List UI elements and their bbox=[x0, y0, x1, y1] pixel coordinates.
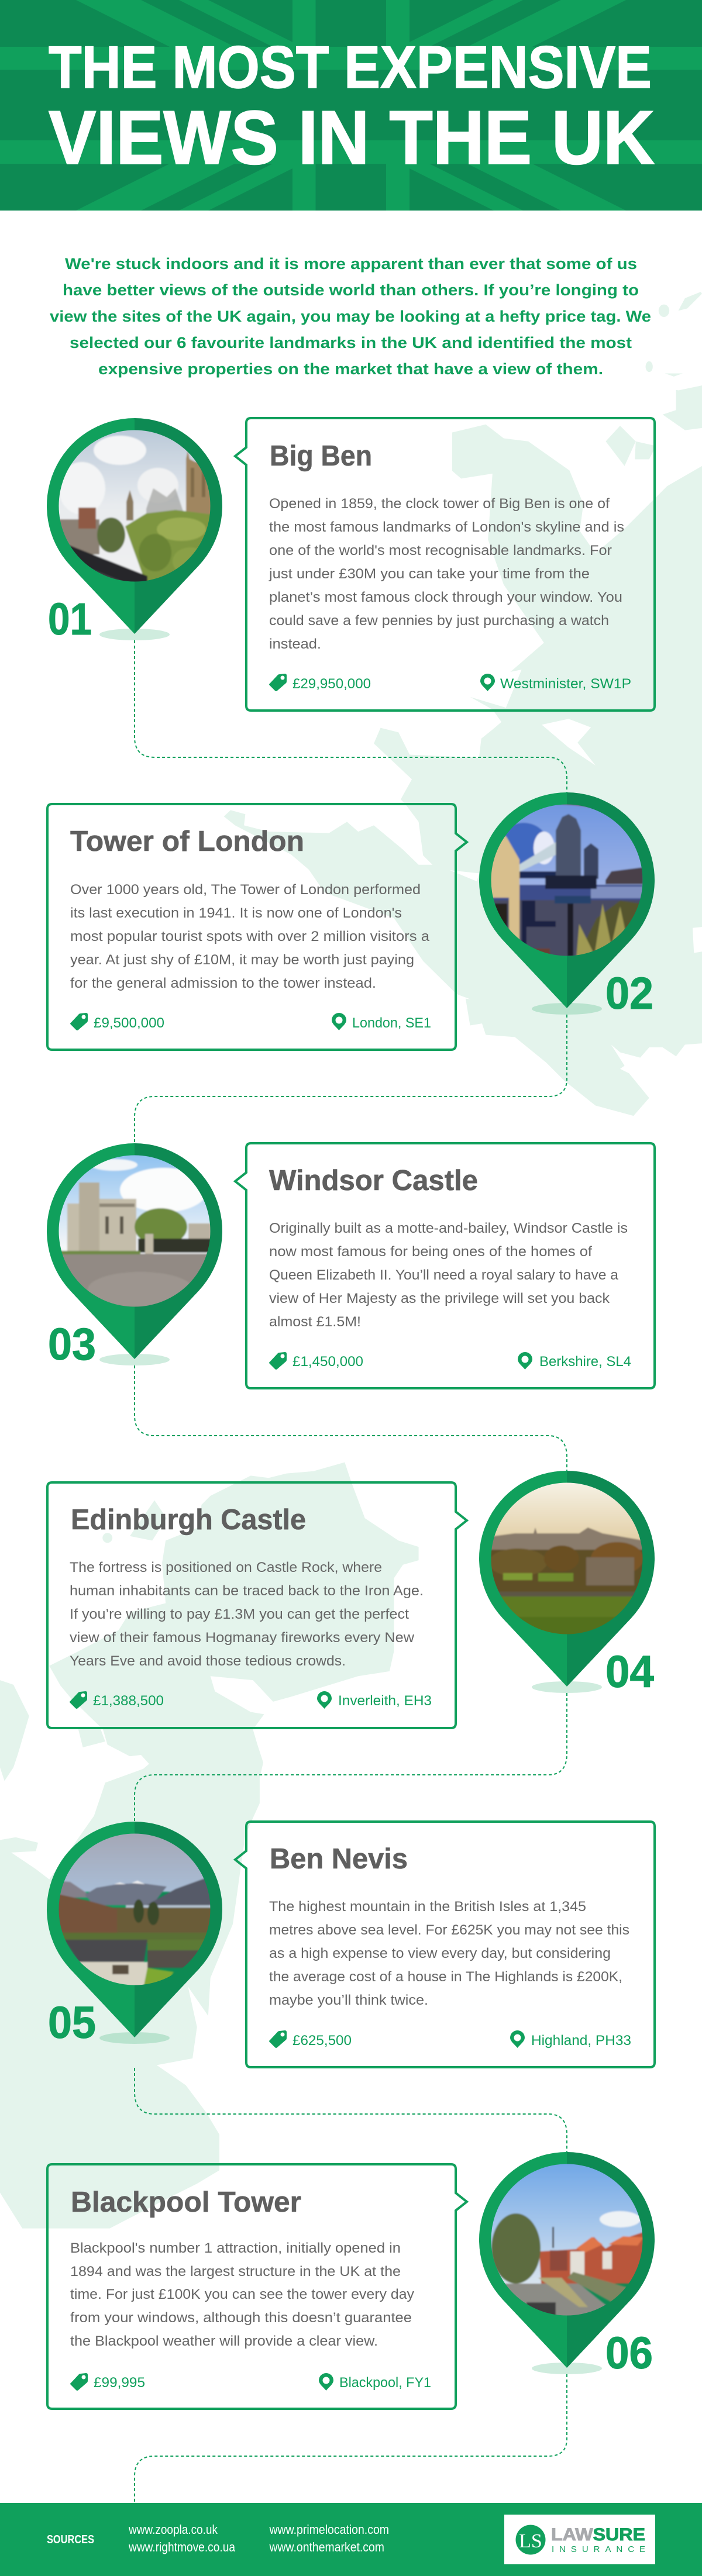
title bbox=[49, 34, 655, 180]
icon: location bbox=[510, 2030, 525, 2048]
pin 02: Tower Bridge photo bbox=[479, 792, 655, 1015]
description: Opened in 1859, the clock tower of Big Ben is one of bbox=[269, 496, 610, 512]
card outline bbox=[47, 804, 467, 1050]
card outline bbox=[47, 2164, 467, 2409]
intro text: have better views of the outside world than others. If you’re longing to bbox=[63, 281, 639, 299]
location: Westminister, SW1P bbox=[500, 676, 631, 692]
icon: location bbox=[317, 1691, 332, 1709]
intro text: view the sites of the UK again, you may be looking at a hefty price tag. We bbox=[50, 308, 651, 325]
description: instead. bbox=[269, 636, 321, 652]
heading: Edinburgh Castle bbox=[71, 1504, 306, 1536]
number 04: 04 bbox=[605, 1647, 654, 1697]
description bbox=[269, 496, 624, 652]
location: Blackpool, FY1 bbox=[339, 2375, 431, 2391]
location: Inverleith, EH3 bbox=[338, 1693, 432, 1709]
card outline bbox=[235, 418, 655, 711]
description: almost £1.5M! bbox=[269, 1314, 361, 1330]
pin 04: Edinburgh photo bbox=[479, 1471, 655, 1693]
description bbox=[269, 1899, 629, 2008]
icon: location bbox=[319, 2373, 333, 2391]
description: from your windows, although this doesn’t guarantee bbox=[70, 2310, 412, 2326]
pin 05: Ben Nevis photo bbox=[47, 1822, 222, 2044]
description: view of their famous Hogmanay fireworks every New bbox=[70, 1630, 415, 1646]
card outline bbox=[47, 1482, 467, 1728]
panel: Ben Nevis bbox=[235, 1822, 655, 2067]
card outline bbox=[235, 1143, 655, 1388]
description: Over 1000 years old, The Tower of London performed bbox=[70, 882, 421, 898]
sources heading: SOURCES bbox=[47, 2533, 94, 2546]
heading: Blackpool Tower bbox=[71, 2187, 301, 2218]
price: £99,995 bbox=[94, 2375, 145, 2391]
icon: price tag bbox=[70, 1691, 87, 1709]
description: planet’s most famous clock through your window. You bbox=[269, 589, 622, 605]
description: maybe you’ll think twice. bbox=[269, 1992, 428, 2008]
header: union flag background bbox=[0, 0, 702, 211]
description: for the general admission to the tower instead. bbox=[70, 975, 376, 991]
description: could save a few pennies by just purchasing a watch bbox=[269, 613, 609, 629]
logo: Lawsure Insurance: LS bbox=[519, 2530, 542, 2552]
heading: Big Ben bbox=[270, 440, 372, 472]
description: view of Her Majesty as the privilege will set you back bbox=[269, 1291, 610, 1306]
description: 1894 and was the largest structure in the UK at the bbox=[70, 2264, 401, 2280]
description: as a high expense to view every day, but considering bbox=[269, 1946, 611, 1961]
description bbox=[70, 1560, 424, 1669]
connector: pin 4 to pin 5 bbox=[135, 1693, 567, 1822]
pin 06: Blackpool photo bbox=[479, 2152, 655, 2374]
panel: Edinburgh Castle bbox=[47, 1482, 467, 1728]
price: £29,950,000 bbox=[292, 676, 371, 692]
panel: Tower of London bbox=[47, 804, 467, 1050]
number 06: 06 bbox=[605, 2328, 653, 2378]
description: human inhabitants can be traced back to the Iron Age. bbox=[70, 1583, 424, 1599]
card outline bbox=[235, 1822, 655, 2067]
description: Queen Elizabeth II. You’ll need a royal salary to have a bbox=[269, 1267, 619, 1283]
description: most popular tourist spots with over 2 million visitors a bbox=[70, 929, 430, 944]
source links bbox=[128, 2522, 389, 2554]
connector: pin 6 to footer bbox=[135, 2374, 567, 2503]
icon: price tag bbox=[269, 2030, 287, 2048]
icon: location bbox=[480, 674, 495, 691]
intro text: expensive properties on the market that have a view of them. bbox=[98, 360, 603, 378]
panel: Big Ben bbox=[235, 418, 655, 711]
pin 01: Big Ben photo bbox=[47, 418, 222, 640]
intro text: selected our 6 favourite landmarks in the UK and identified the most bbox=[70, 334, 632, 351]
background UK map bbox=[0, 292, 702, 2229]
description: Years Eve and avoid those tedious crowds. bbox=[70, 1653, 346, 1669]
number 01: 01 bbox=[48, 594, 92, 644]
description: Originally built as a motte-and-bailey, Windsor Castle is bbox=[269, 1220, 628, 1236]
number 03: 03 bbox=[48, 1319, 96, 1370]
heading: Ben Nevis bbox=[270, 1843, 408, 1875]
description: The fortress is positioned on Castle Rock, where bbox=[70, 1560, 382, 1575]
connector: pin 5 to pin 6 bbox=[135, 2068, 567, 2152]
icon: location bbox=[332, 1013, 346, 1030]
description: The highest mountain in the British Isles at 1,345 bbox=[269, 1899, 586, 1915]
title: VIEWS IN THE UK bbox=[49, 95, 655, 180]
logo: Lawsure Insurance: LAWSURE bbox=[551, 2525, 645, 2544]
pin 03: Windsor Castle photo bbox=[47, 1143, 222, 1365]
description: just under £30M you can take your time from the bbox=[269, 566, 590, 582]
location: Berkshire, SL4 bbox=[539, 1354, 631, 1370]
source links: www.primelocation.com bbox=[269, 2522, 389, 2537]
description: year. At just shy of £10M, it may be worth just paying bbox=[70, 952, 414, 968]
price: £9,500,000 bbox=[94, 1015, 164, 1031]
connector: pin 1 to pin 2 bbox=[135, 640, 567, 792]
description: time. For just £100K you can see the tower every day bbox=[70, 2287, 414, 2302]
icon: location bbox=[518, 1352, 532, 1370]
icon: price tag bbox=[70, 2373, 88, 2391]
source links: www.rightmove.co.ua bbox=[128, 2540, 236, 2554]
footer bbox=[0, 2503, 702, 2576]
location: Highland, PH33 bbox=[531, 2033, 631, 2049]
number 05: 05 bbox=[48, 1998, 96, 2048]
source links: www.zoopla.co.uk bbox=[128, 2522, 218, 2537]
description: now most famous for being ones of the homes of bbox=[269, 1244, 592, 1260]
connector: pin 2 to pin 3 bbox=[135, 1015, 567, 1143]
panel: Blackpool Tower bbox=[47, 2164, 467, 2409]
source links: www.onthemarket.com bbox=[269, 2540, 384, 2554]
logo: Lawsure Insurance: INSURANCE bbox=[552, 2544, 645, 2554]
description: one of the world's most recognisable landmarks. For bbox=[269, 543, 612, 558]
heading: Tower of London bbox=[70, 826, 304, 857]
description: its last execution in 1941. It is now one of London's bbox=[70, 905, 402, 921]
logo: Lawsure Insurance bbox=[504, 2515, 655, 2564]
heading: Windsor Castle bbox=[269, 1165, 478, 1196]
title: THE MOST EXPENSIVE bbox=[49, 34, 652, 101]
number 02: 02 bbox=[605, 968, 653, 1019]
description: metres above sea level. For £625K you may not see this bbox=[269, 1922, 629, 1938]
description: Blackpool's number 1 attraction, initially opened in bbox=[70, 2240, 401, 2256]
description bbox=[269, 1220, 628, 1330]
description: the Blackpool weather will provide a clear view. bbox=[70, 2333, 378, 2349]
price: £1,388,500 bbox=[93, 1693, 164, 1709]
price: £1,450,000 bbox=[292, 1354, 363, 1370]
description: If you’re willing to pay £1.3M you can get the perfect bbox=[70, 1606, 409, 1622]
icon: price tag bbox=[269, 674, 287, 691]
price: £625,500 bbox=[292, 2033, 352, 2049]
connector: pin 3 to pin 4 bbox=[135, 1365, 567, 1471]
location: London, SE1 bbox=[352, 1015, 431, 1031]
description bbox=[70, 882, 430, 991]
panel: Windsor Castle bbox=[235, 1143, 655, 1388]
description: the average cost of a house in The Highlands is £200K, bbox=[269, 1969, 622, 1985]
icon: price tag bbox=[269, 1352, 287, 1370]
description bbox=[70, 2240, 414, 2349]
intro text bbox=[50, 255, 651, 378]
description: the most famous landmarks of London's skyline and is bbox=[269, 519, 624, 535]
intro text: We're stuck indoors and it is more apparent than ever that some of us bbox=[65, 255, 637, 273]
icon: price tag bbox=[70, 1013, 88, 1030]
